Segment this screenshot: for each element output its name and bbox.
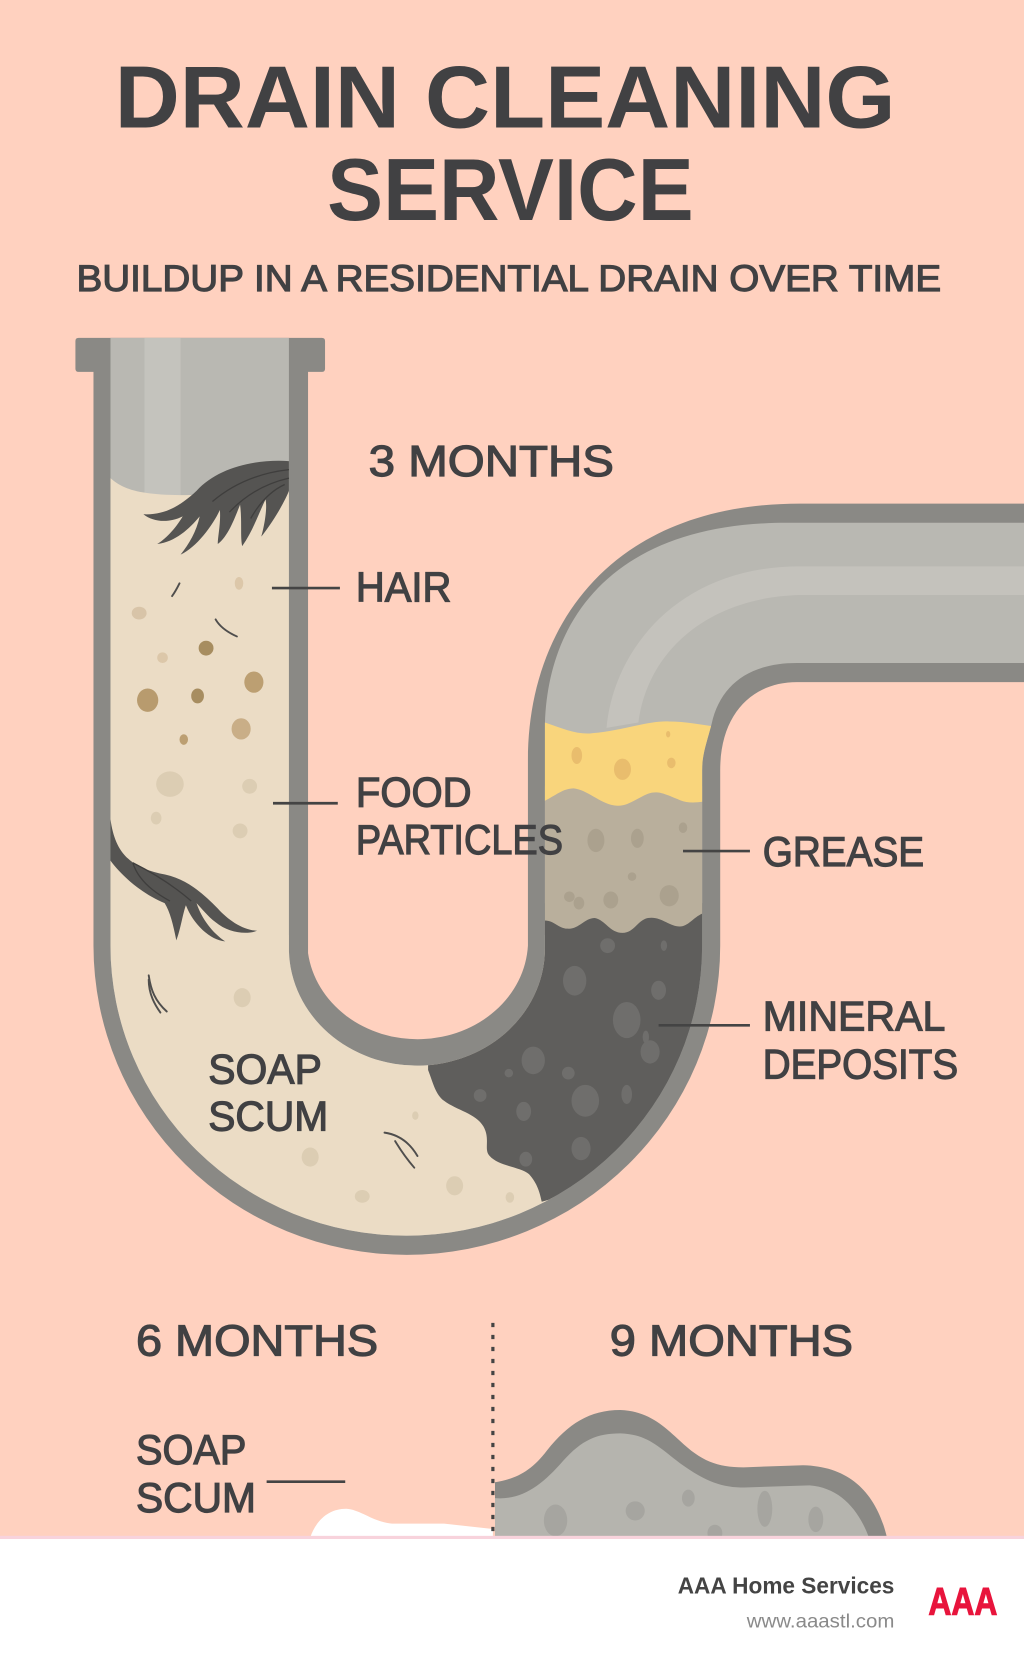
pipe interior: [110, 338, 1024, 1236]
company name: AAA Home Services: [678, 1573, 894, 1599]
callout: mineral deposits: [659, 993, 958, 1087]
loose hairs: [149, 583, 417, 1168]
logo: AAA: AAA: [928, 1580, 997, 1624]
title: SERVICE: [327, 140, 694, 239]
label: 3 months: 3 MONTHS: [369, 438, 614, 486]
panel: 9 months: [495, 1318, 887, 1542]
hair clump lower: [110, 819, 257, 941]
heading: 9 months: 9 MONTHS: [610, 1318, 853, 1366]
soap scum blob: [310, 1509, 493, 1537]
clogged pipe section: [495, 1410, 887, 1542]
callout: grease: GREASE: [763, 828, 924, 875]
label: soap scum: [136, 1426, 256, 1521]
callout: food particles: [273, 768, 563, 863]
grease layer: [544, 721, 711, 806]
subtitle: BUILDUP IN A RESIDENTIAL DRAIN OVER TIME: [76, 257, 941, 299]
label: soap scum in pipe: SOAP: [208, 1046, 322, 1093]
hair clump upper: [143, 461, 289, 555]
soap scum leader line: [267, 1480, 345, 1483]
residue spots: [564, 822, 687, 910]
clogged layers: [96, 461, 722, 1254]
panel: 6 months: [136, 1318, 493, 1537]
pipe highlights: [144, 338, 1024, 728]
mineral spots: [474, 938, 667, 1167]
title: [115, 47, 895, 239]
heading: 6 months: 6 MONTHS: [136, 1318, 378, 1366]
callout: hair: HAIR: [356, 563, 451, 610]
callout: food particles: PARTICLES: [356, 816, 563, 863]
footer: [0, 1536, 1024, 1666]
mineral deposits layer: [428, 903, 722, 1202]
dotted divider: [491, 1323, 494, 1537]
P-trap pipe diagram: [75, 338, 1024, 1255]
callout: mineral deposits: DEPOSITS: [763, 1040, 958, 1087]
label: soap scum: SCUM: [136, 1474, 256, 1521]
grease spots: [571, 731, 676, 780]
website: www.aaastl.com: [746, 1612, 894, 1633]
label: soap scum in pipe: SCUM: [208, 1092, 328, 1140]
food particles: [132, 577, 514, 1203]
callout: food particles: FOOD: [356, 768, 472, 815]
label: soap scum: SOAP: [136, 1426, 246, 1473]
title: DRAIN CLEANING: [115, 47, 895, 147]
grease residue layer: [545, 788, 702, 933]
pipe wall: [75, 338, 1024, 1255]
soap scum and food layer: [96, 461, 552, 1254]
callout: mineral deposits: MINERAL: [763, 993, 945, 1040]
label: soap scum in pipe: [208, 1046, 328, 1140]
